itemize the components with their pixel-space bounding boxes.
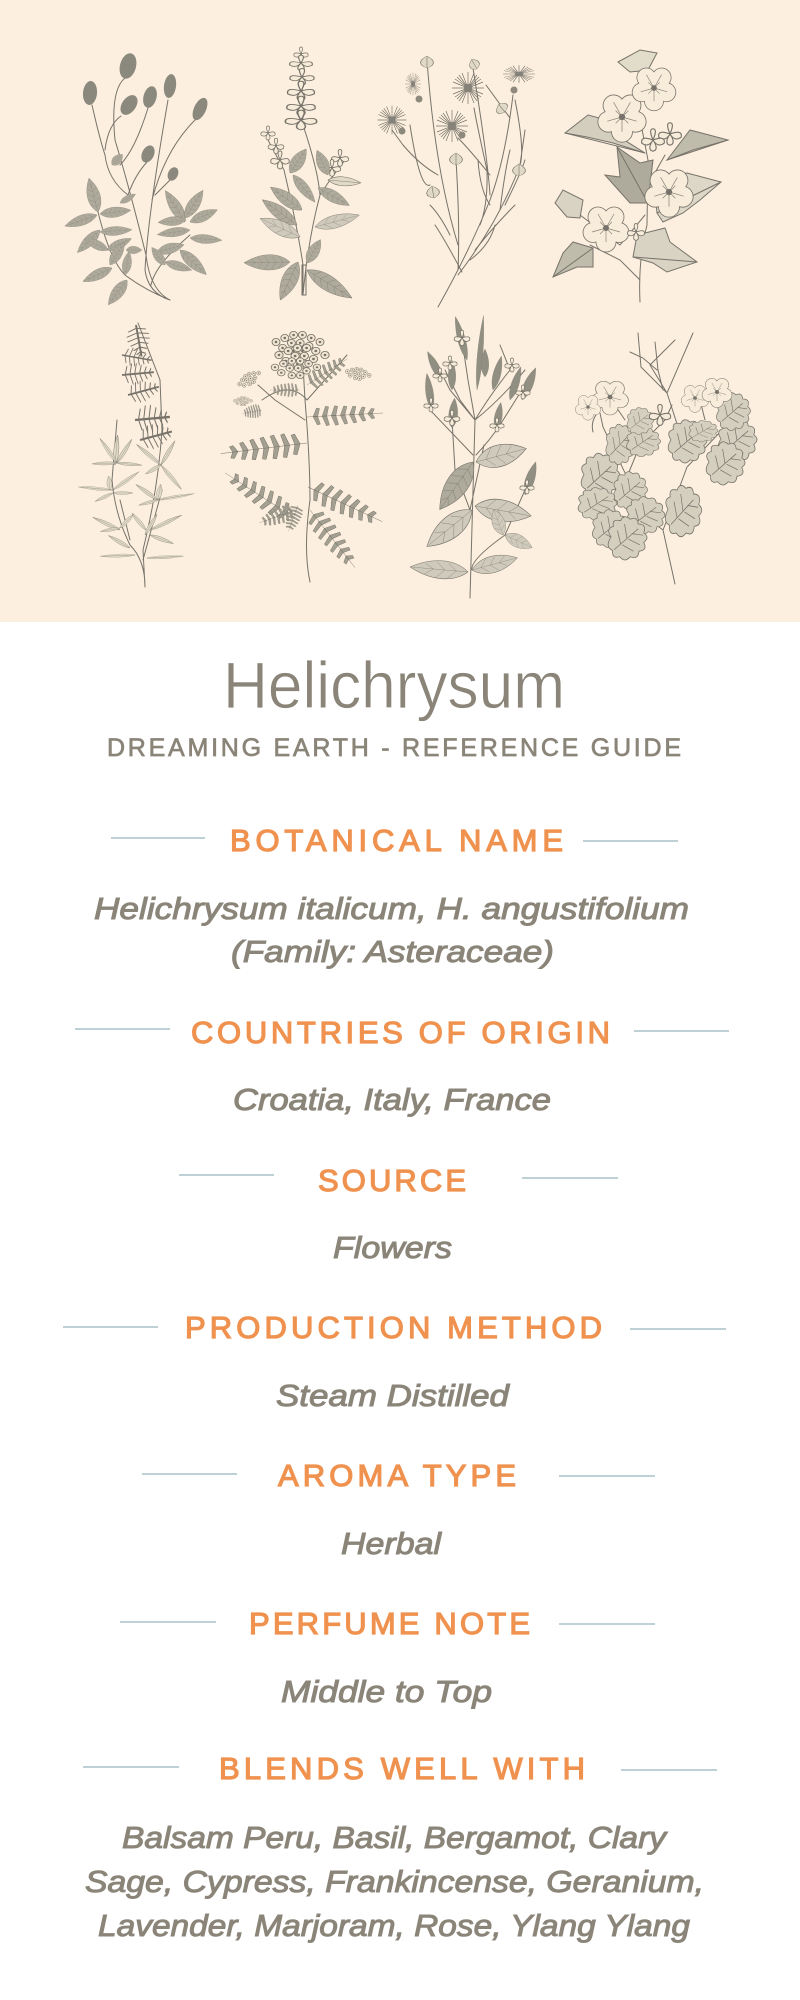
heading: countries of origin: COUNTRIES OF ORIGIN [191,1015,610,1050]
text: blends value: Lavender, Marjoram, Rose, Ylang Ylang [98,1908,690,1943]
section: botanical name [94,823,689,969]
heading: perfume note: PERFUME NOTE [249,1606,530,1641]
heading: botanical name: BOTANICAL NAME [230,823,563,858]
text: source value: Flowers [333,1230,452,1265]
section: blends well with [83,1751,717,1943]
heading: aroma type: AROMA TYPE [278,1458,516,1493]
text: countries value: Croatia, Italy, France [233,1082,551,1117]
title: Helichrysum [223,648,565,722]
panel background [0,0,800,622]
illustration: cornflower plant [378,56,535,307]
section: production method [63,1310,726,1413]
illustration: narrow-leaf flowering plant [78,323,195,587]
text: blends value: Balsam Peru, Basil, Bergamot, Clary [122,1820,669,1855]
text: perfume value: Middle to Top [281,1674,492,1709]
heading: production method: PRODUCTION METHOD [185,1310,602,1345]
text: aroma value: Herbal [341,1526,442,1561]
illustration: verbena plant [409,315,540,598]
illustration: celandine plant [575,333,757,584]
section: perfume note [120,1606,655,1709]
text: blends value [85,1820,704,1943]
illustration: mallow plant [553,50,728,302]
text: botanical name value: Helichrysum italicum, H. angustifolium [94,891,689,926]
text: production value: Steam Distilled [276,1378,511,1413]
text: blends value: Sage, Cypress, Frankincense, Geranium, [85,1864,704,1899]
section: source [179,1163,618,1265]
illustration: sage plant [244,47,361,305]
section: countries of origin [75,1015,729,1117]
subtitle: DREAMING EARTH - REFERENCE GUIDE [107,734,681,762]
section: aroma type [142,1458,655,1561]
illustration: tansy plant [219,331,387,582]
text: botanical name value: (Family: Asteraceae) [231,934,554,969]
heading: source: SOURCE [318,1163,466,1198]
panel: botanical illustrations [0,0,800,622]
illustration: burnet plant [63,51,222,308]
text: botanical name value [94,891,689,969]
heading: blends well with: BLENDS WELL WITH [219,1751,585,1786]
